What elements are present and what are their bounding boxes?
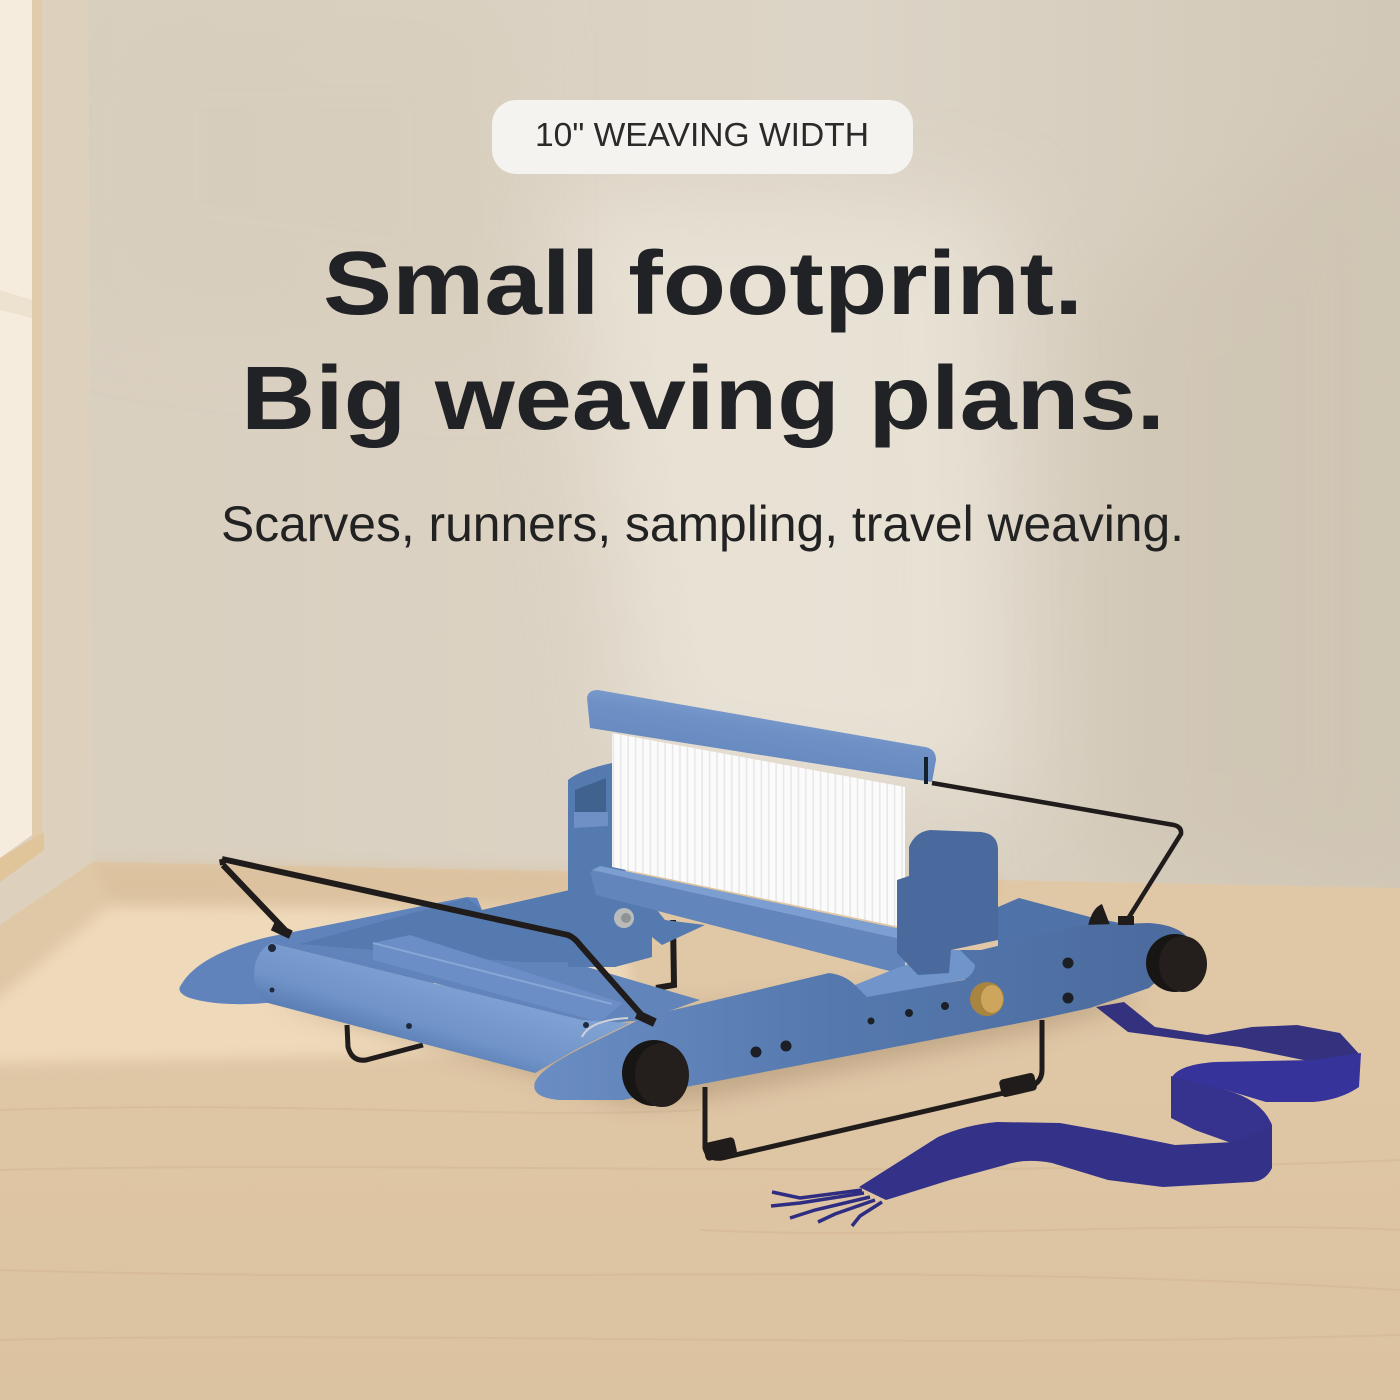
inner deck surface: [300, 944, 700, 1026]
tube screws: [268, 944, 589, 1029]
strap: long tail: [859, 1122, 1272, 1200]
loom shadow: [270, 980, 1150, 1105]
woven blue strap: [771, 1002, 1361, 1226]
strap: upper flat section: [1096, 1002, 1361, 1062]
strap: return section: [1171, 1076, 1272, 1145]
wire foot back right: [1118, 916, 1134, 925]
background: window and left wall: [0, 0, 93, 925]
badge: 10 inch weaving width: [492, 100, 913, 174]
strap: fringe: [771, 1190, 882, 1226]
title: [241, 234, 1165, 449]
legs: front stand: [705, 1020, 1042, 1158]
holes: [750, 958, 1074, 1058]
reed: [612, 733, 905, 928]
top bar: [587, 690, 936, 784]
legs: left rear: [347, 1025, 423, 1060]
wire foot left: [271, 922, 293, 939]
wire foot right: [635, 1010, 657, 1027]
silver clip: [582, 1018, 628, 1037]
rail top light strip: [829, 950, 985, 1000]
background: wooden table: [0, 862, 1400, 1400]
icon: left knob: [622, 1040, 689, 1107]
icon: brass knob: [970, 982, 1004, 1016]
title: Small footprint.: [323, 234, 1083, 334]
far rail inner face: [300, 890, 575, 962]
main front rail: [534, 923, 1195, 1100]
left wire stand: [222, 859, 646, 1020]
left heddle support: [568, 763, 705, 967]
icon: right knob: [1146, 934, 1207, 992]
inner beam: [373, 935, 623, 1022]
left far rail with inner face: [179, 890, 575, 1004]
left tube roller: [254, 943, 630, 1073]
loom: [179, 690, 1207, 1161]
background: room wall: [0, 0, 1400, 900]
right wire stand: [932, 783, 1181, 922]
right back tube: [998, 898, 1130, 955]
legs: center: [656, 920, 674, 988]
heddle lower bar: [590, 866, 905, 975]
subtitle: Scarves, runners, sampling, travel weaving.: [221, 496, 1184, 552]
strap: fold band: [1171, 1053, 1361, 1102]
title: Big weaving plans.: [241, 349, 1165, 449]
right heddle block: [897, 830, 998, 975]
small black hook: [1088, 904, 1110, 926]
badge: 10 inch weaving width: 10" WEAVING WIDTH: [535, 116, 869, 153]
